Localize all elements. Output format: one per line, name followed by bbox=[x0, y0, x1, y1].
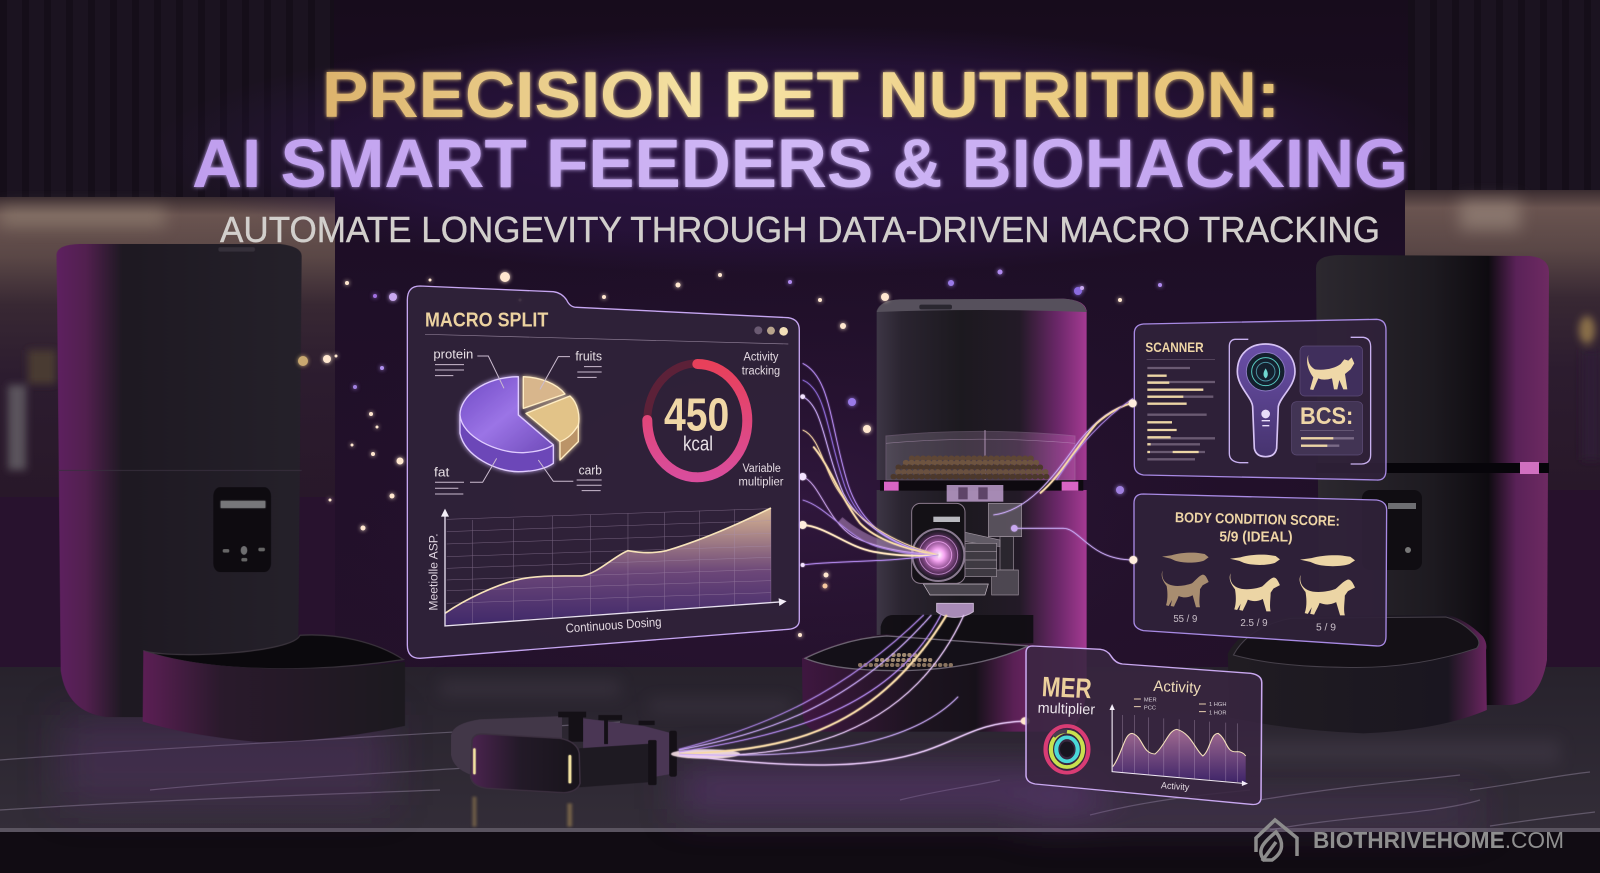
lower frame bbox=[923, 584, 988, 595]
dog 1 underweight bbox=[1162, 553, 1209, 607]
dispensing slot bbox=[881, 615, 1033, 643]
gauge labels: Activity bbox=[743, 350, 778, 364]
panel: body condition score bbox=[1129, 494, 1387, 646]
title purple glow bbox=[150, 25, 1430, 275]
right lower cabinets bbox=[1405, 490, 1600, 670]
pie labels: carb bbox=[579, 463, 602, 478]
handheld scanner icon bbox=[1237, 344, 1295, 457]
right assembly bbox=[940, 503, 1022, 595]
chart legend: PCC bbox=[1144, 706, 1156, 711]
purple protein and fat slices bbox=[460, 377, 553, 472]
chart x label: Continuous Dosing bbox=[565, 615, 662, 636]
score frame bbox=[1134, 494, 1387, 646]
scanner connector dot bbox=[1129, 399, 1137, 407]
top block bbox=[947, 485, 1003, 502]
black gap bbox=[1316, 463, 1549, 473]
chart legend: 1 HGH bbox=[1209, 702, 1227, 708]
corner brackets bbox=[1229, 337, 1371, 464]
activity title: Activity bbox=[1153, 678, 1202, 697]
stream end dots bbox=[799, 394, 807, 567]
MER heading: MER bbox=[1041, 672, 1093, 705]
activity area chart bbox=[1109, 704, 1248, 786]
right smart feeder bbox=[1228, 255, 1549, 733]
data streams from feeder to scanner panels bbox=[993, 398, 1133, 560]
bowl front bbox=[802, 634, 1073, 732]
scanner frame bbox=[1134, 319, 1386, 480]
feeder body bbox=[1316, 255, 1549, 705]
lower body bbox=[877, 490, 1087, 727]
right kitchen objects bbox=[1579, 316, 1600, 460]
camera housing bbox=[912, 503, 965, 583]
pie callouts bbox=[435, 356, 602, 494]
dispenser mechanism bbox=[912, 485, 1022, 617]
chart legend bbox=[1134, 698, 1227, 716]
dispensing nozzle bbox=[937, 603, 973, 617]
chart legend: MER bbox=[1144, 698, 1157, 703]
left band highlight bbox=[0, 208, 165, 226]
pink slit right bbox=[1062, 482, 1078, 491]
subtitle: AUTOMATE LONGEVITY THROUGH DATA-DRIVEN MACRO TRACKING bbox=[220, 209, 1380, 250]
camera lens bbox=[912, 529, 964, 581]
panel frame bbox=[1026, 646, 1262, 805]
dog 2 bbox=[1230, 555, 1280, 611]
score heading: BODY CONDITION SCORE: bbox=[1175, 510, 1340, 530]
calorie value: 450 bbox=[664, 389, 729, 441]
left top dark slats bbox=[0, 0, 334, 197]
BCS card bbox=[1292, 402, 1363, 455]
left kitchen bottles bbox=[8, 350, 56, 470]
right top dark slats bbox=[1408, 0, 1600, 192]
dog scores bbox=[1173, 614, 1336, 634]
lid tab bbox=[919, 305, 952, 309]
kibble in bowl bbox=[860, 655, 953, 665]
pie labels: protein bbox=[433, 347, 473, 362]
smart collar and streams bbox=[451, 615, 1029, 827]
gauge labels: Variable bbox=[742, 461, 781, 475]
marble veins bbox=[0, 722, 1595, 830]
camera label bbox=[933, 517, 960, 522]
calorie unit: kcal bbox=[683, 432, 713, 455]
pie labels bbox=[433, 347, 602, 480]
collar data streams bbox=[671, 615, 1025, 765]
collar far strap bbox=[583, 718, 675, 777]
BCS card: BCS: bbox=[1300, 403, 1353, 430]
feeder display bbox=[1362, 490, 1422, 570]
table front edge bbox=[0, 832, 1600, 873]
stream convergence glow bbox=[840, 520, 938, 555]
gauge labels: multiplier bbox=[738, 475, 783, 489]
cat card bbox=[1300, 346, 1363, 396]
panel: MER multiplier bbox=[1026, 646, 1262, 805]
centre ambient glow bbox=[280, 240, 1320, 760]
food bowl tray bbox=[1228, 615, 1487, 733]
right kitchen shelf band bbox=[1405, 190, 1600, 490]
gauge labels: tracking bbox=[742, 363, 780, 377]
buckles bbox=[558, 712, 677, 777]
left lower cabinets bbox=[0, 497, 335, 670]
dog scores: 55 / 9 bbox=[1173, 614, 1198, 625]
dog scores: 5 / 9 bbox=[1316, 623, 1336, 634]
activity rings bbox=[1046, 726, 1088, 773]
tracker lights bbox=[473, 748, 571, 783]
kibble window bbox=[886, 430, 1075, 480]
panel: scanner bbox=[1129, 319, 1386, 480]
centre bowl bbox=[802, 634, 1073, 732]
panel: scanner and body condition bbox=[1129, 319, 1387, 646]
marble smudges bbox=[440, 680, 1560, 764]
upper canister bbox=[877, 299, 1087, 480]
area chart bbox=[441, 508, 787, 626]
chart x label: Activity bbox=[1161, 781, 1190, 793]
gauge labels bbox=[738, 350, 783, 489]
chart legend: 1 HOR bbox=[1209, 711, 1227, 716]
dark gap bbox=[880, 479, 1083, 491]
collar front strap bbox=[579, 743, 656, 787]
watermark logo bbox=[1256, 820, 1564, 861]
feeder display bbox=[213, 487, 271, 572]
chart axes bbox=[1112, 707, 1243, 783]
pie chart bbox=[460, 377, 579, 472]
dog 3 ideal bbox=[1300, 555, 1355, 615]
pink slit left bbox=[884, 482, 899, 491]
score connector dot bbox=[1129, 556, 1137, 564]
left kitchen shelf band bbox=[0, 197, 335, 497]
left smart feeder bbox=[57, 244, 405, 742]
tracker pod bbox=[471, 734, 580, 793]
data streams from macro panel to feeder lens bbox=[799, 363, 938, 567]
scanner data rows bbox=[1147, 359, 1215, 459]
panel heading: MACRO SPLIT bbox=[425, 310, 548, 332]
food bowl tray bbox=[143, 635, 405, 742]
chart axes bbox=[445, 515, 780, 626]
floating particles bbox=[298, 270, 1162, 637]
title line 1: PRECISION PET NUTRITION: bbox=[322, 58, 1280, 131]
strap keeper bbox=[648, 740, 657, 785]
lid tab bbox=[218, 247, 255, 252]
bowl interior bbox=[805, 636, 1028, 671]
panel: macro split bbox=[407, 286, 799, 658]
collar back strap bbox=[451, 716, 562, 775]
house leaf icon bbox=[1256, 820, 1297, 861]
cat icon bbox=[1307, 355, 1354, 390]
marble table top bbox=[0, 667, 1600, 830]
panel frame bbox=[407, 286, 799, 658]
body seam bbox=[58, 469, 302, 471]
calorie gauge bbox=[647, 363, 747, 477]
window dots bbox=[754, 326, 788, 336]
feeder body bbox=[57, 244, 302, 717]
table highlight strip bbox=[0, 828, 1600, 832]
pink slit bbox=[1520, 462, 1539, 474]
brand text: BIOTHRIVEHOME.COM bbox=[1313, 827, 1564, 853]
right band highlight bbox=[1460, 200, 1520, 230]
table purple reflection bbox=[60, 715, 1480, 824]
centre smart feeder bbox=[877, 299, 1087, 727]
pie labels: fruits bbox=[575, 349, 602, 364]
kibble pile bbox=[893, 458, 1051, 477]
title line 2: AI SMART FEEDERS & BIOHACKING bbox=[192, 125, 1408, 202]
MER connector dot bbox=[1021, 717, 1029, 725]
score value: 5/9 (IDEAL) bbox=[1219, 529, 1293, 545]
pie labels: fat bbox=[434, 465, 450, 480]
collar reflections bbox=[473, 797, 572, 827]
lid rim bbox=[877, 299, 1087, 312]
dog scores: 2.5 / 9 bbox=[1240, 618, 1268, 629]
scanner heading: SCANNER bbox=[1145, 339, 1204, 355]
multiplier label: multiplier bbox=[1037, 701, 1095, 718]
chart y label: Meetiolle ASP. bbox=[427, 533, 441, 611]
gold fruit and carb slices bbox=[523, 377, 579, 460]
